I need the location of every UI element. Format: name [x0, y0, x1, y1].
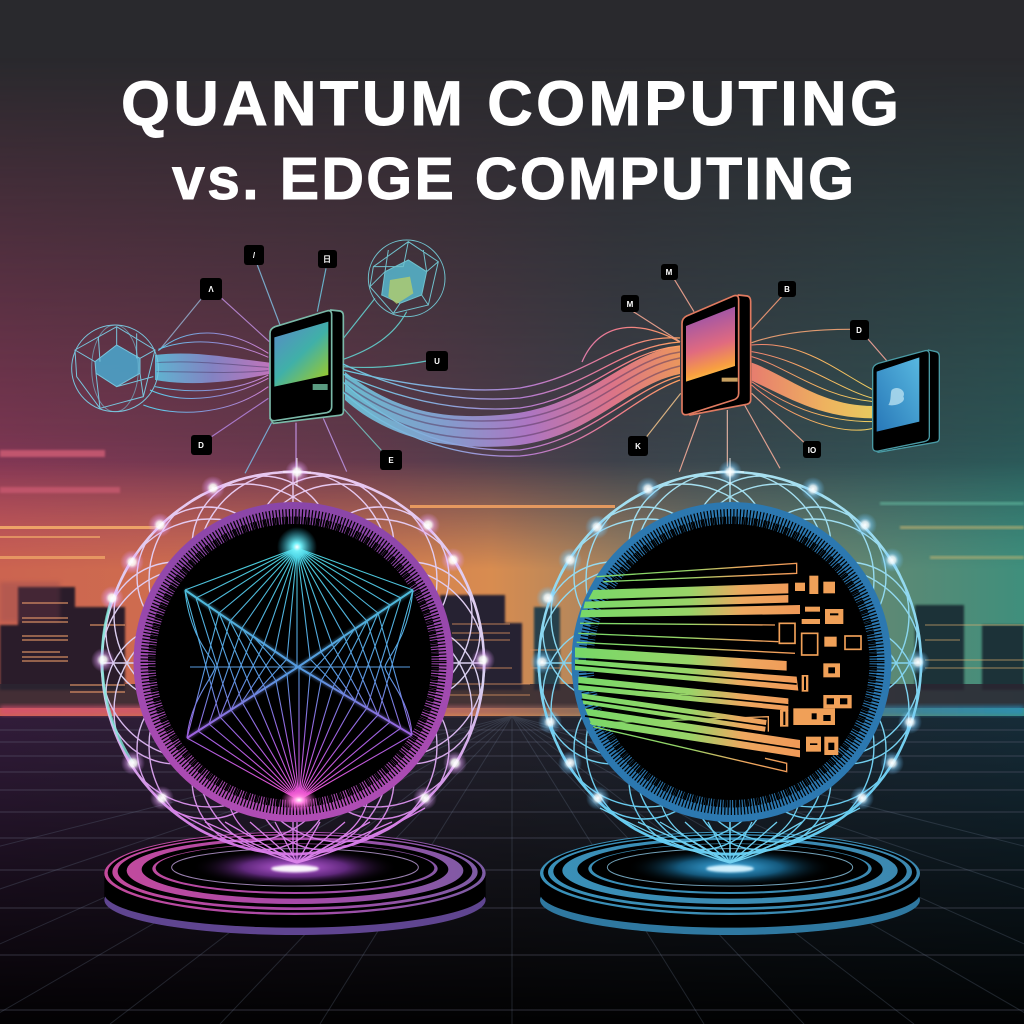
icon tiles: labelled nodes: Λ	[208, 285, 214, 294]
device: far right tablet	[873, 350, 939, 452]
quantum sphere	[91, 458, 495, 863]
stream: edge device to far tablet	[752, 344, 873, 430]
connector lines to icon tiles	[633, 279, 887, 472]
projection fan to platform	[600, 800, 860, 863]
edge sphere	[530, 458, 930, 863]
data blocks	[780, 576, 852, 755]
title: vs. EDGE COMPUTING	[172, 146, 854, 212]
icon tiles: labelled nodes: D	[856, 326, 862, 335]
blue spiked ring	[572, 502, 892, 822]
purple spiked ring	[134, 502, 454, 822]
title: QUANTUM COMPUTING	[121, 69, 899, 139]
icon tiles: labelled nodes: /	[253, 251, 256, 260]
main data stream between devices	[343, 327, 680, 456]
icon tiles: labelled nodes: 日	[323, 255, 331, 264]
background: city skyline	[0, 582, 1024, 708]
icon tiles: labelled nodes: E	[388, 456, 394, 465]
background: perspective floor grid	[0, 706, 1024, 1024]
shell stars	[91, 458, 495, 810]
wireframe shell	[538, 471, 922, 855]
icon tiles: labelled nodes: B	[784, 285, 790, 294]
stream: sphere to device	[143, 333, 269, 412]
icon tiles: labelled nodes	[191, 245, 869, 470]
glow nodes	[277, 527, 317, 567]
device: edge tablet	[682, 295, 751, 415]
icon tiles: labelled nodes: M	[627, 300, 634, 309]
connector lines to icon tiles	[160, 265, 427, 473]
device: quantum tablet	[270, 310, 343, 423]
lattice diagram	[185, 548, 413, 800]
icon tiles: labelled nodes: D	[198, 441, 204, 450]
edge platform	[540, 832, 920, 935]
projection fan to platform	[170, 800, 425, 863]
background: sky gradient	[0, 0, 1024, 720]
icon tiles: labelled nodes: M	[666, 268, 673, 277]
left network: quantum device, nodes and streams	[72, 240, 445, 473]
data bars	[575, 563, 861, 772]
node: top right wireframe sphere	[368, 240, 445, 317]
right network: edge device, nodes and streams	[633, 279, 939, 472]
icon tiles: labelled nodes: U	[434, 357, 440, 366]
shell stars	[530, 458, 930, 810]
background: horizontal light streaks	[0, 450, 1024, 559]
quantum platform	[104, 832, 486, 935]
wireframe shell	[101, 471, 485, 855]
icon tiles: labelled nodes: K	[635, 442, 641, 451]
title	[121, 69, 899, 212]
node: left wireframe sphere	[72, 325, 158, 412]
icon tiles: labelled nodes: IO	[808, 446, 816, 455]
teal edge tint	[102, 598, 133, 763]
